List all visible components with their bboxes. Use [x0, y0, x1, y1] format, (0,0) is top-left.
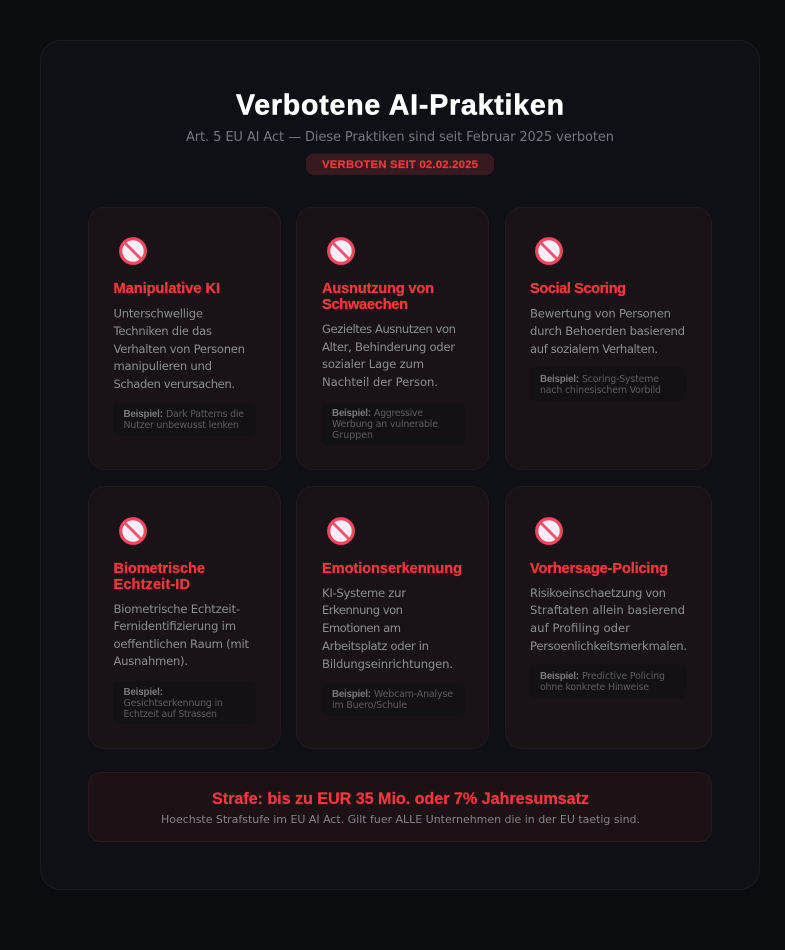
- card text: auf sozialem Verhalten.: [530, 342, 658, 356]
- card text: Ausnahmen).: [114, 654, 188, 668]
- example box: Gesichtserkennung in: [124, 698, 223, 709]
- card text: Bildungseinrichtungen.: [322, 657, 453, 671]
- title: Verbotene AI-Praktiken: [236, 90, 564, 122]
- card: Biometrische Echtzeit-ID: [88, 486, 280, 748]
- card title: Social Scoring: [530, 281, 626, 297]
- example box: Beispiel:: [540, 374, 579, 385]
- card title: [322, 281, 434, 313]
- example box: Scoring-Systeme: [582, 374, 659, 385]
- card text: Persoenlichkeitsmerkmalen.: [530, 639, 687, 653]
- example box: Werbung an vulnerable: [332, 419, 438, 430]
- card title: Ausnutzung von: [322, 281, 434, 297]
- penalty callout: [88, 772, 712, 842]
- icon: prohibited: [329, 519, 353, 543]
- card text: Verhalten von Personen: [114, 342, 245, 356]
- card title: Vorhersage-Policing: [530, 561, 668, 577]
- card text: [322, 586, 453, 671]
- example box: [322, 683, 465, 716]
- example box: [322, 402, 465, 446]
- icon: prohibited: [329, 239, 353, 263]
- card text: [530, 586, 687, 653]
- card: Manipulative KI: [88, 208, 280, 470]
- card title: Echtzeit-ID: [114, 577, 190, 593]
- penalty heading: Strafe: bis zu EUR 35 Mio. oder 7% Jahresumsatz: [212, 790, 589, 808]
- example box: [113, 403, 256, 436]
- card text: [322, 322, 456, 389]
- card text: oeffentlichen Raum (mit: [114, 637, 249, 651]
- example box: ohne konkrete Hinweise: [540, 682, 649, 693]
- example box: Beispiel:: [332, 689, 371, 700]
- example box: Echtzeit auf Strassen: [124, 709, 217, 720]
- icon: prohibited: [121, 239, 145, 263]
- example box: Beispiel:: [540, 671, 579, 682]
- icon: prohibited: [121, 519, 145, 543]
- card text: Biometrische Echtzeit-: [114, 602, 240, 616]
- card title: Schwaechen: [322, 297, 408, 313]
- card text: Gezieltes Ausnutzen von: [322, 322, 456, 336]
- card: Emotionserkennung: [296, 486, 488, 748]
- card text: Arbeitsplatz oder in: [322, 639, 429, 653]
- card title: Emotionserkennung: [322, 561, 462, 577]
- card title: Manipulative KI: [114, 281, 220, 297]
- card text: KI-Systeme zur: [322, 586, 406, 600]
- card text: Nachteil der Person.: [322, 375, 438, 389]
- card: Ausnutzung von Schwaechen: [296, 208, 488, 470]
- badge: VERBOTEN SEIT 02.02.2025: [322, 159, 479, 171]
- card text: Techniken die das: [112, 324, 212, 338]
- card text: auf Profiling oder: [530, 621, 630, 635]
- card: Social Scoring: [506, 208, 712, 470]
- card text: Emotionen am: [322, 621, 401, 635]
- icon: prohibited: [537, 239, 561, 263]
- card text: Erkennung von: [322, 603, 403, 617]
- example box: Nutzer unbewusst lenken: [124, 420, 239, 431]
- card: Vorhersage-Policing: [506, 486, 712, 748]
- example box: Predictive Policing: [582, 671, 665, 682]
- example box: Dark Patterns die: [166, 409, 244, 420]
- card text: Bewertung von Personen: [530, 306, 671, 320]
- card text: Schaden verursachen.: [114, 377, 235, 391]
- card text: [112, 306, 245, 391]
- penalty text: Hoechste Strafstufe im EU AI Act. Gilt fuer ALLE Unternehmen die in der EU taetig sind.: [161, 813, 640, 826]
- card text: durch Behoerden basierend: [530, 324, 685, 338]
- example box: Webcam-Analyse: [374, 689, 453, 700]
- example box: [530, 367, 687, 401]
- card text: [530, 306, 685, 356]
- card text: manipulieren und: [114, 359, 212, 373]
- card text: [114, 602, 249, 668]
- example box: Beispiel:: [124, 409, 163, 420]
- example box: Beispiel:: [332, 408, 371, 419]
- example box: Gruppen: [332, 430, 373, 441]
- card title: Biometrische: [114, 561, 205, 577]
- example box: im Buero/Schule: [332, 700, 407, 711]
- example box: nach chinesischem Vorbild: [540, 385, 661, 396]
- card title: [114, 561, 205, 593]
- subtitle: Art. 5 EU AI Act — Diese Praktiken sind seit Februar 2025 verboten: [186, 130, 614, 145]
- card text: Risikoeinschaetzung von: [530, 586, 666, 600]
- example box: [113, 681, 256, 724]
- card text: sozialer Lage zum: [322, 357, 424, 371]
- example box: Aggressive: [374, 408, 423, 419]
- example box: [530, 664, 687, 698]
- card text: Straftaten allein basierend: [530, 603, 685, 617]
- card text: Fernidentifizierung im: [114, 619, 236, 633]
- icon: prohibited: [537, 519, 561, 543]
- example box: Beispiel:: [124, 687, 163, 698]
- badge: [306, 154, 494, 175]
- card text: Alter, Behinderung oder: [322, 340, 455, 354]
- card text: Unterschwellige: [114, 306, 203, 320]
